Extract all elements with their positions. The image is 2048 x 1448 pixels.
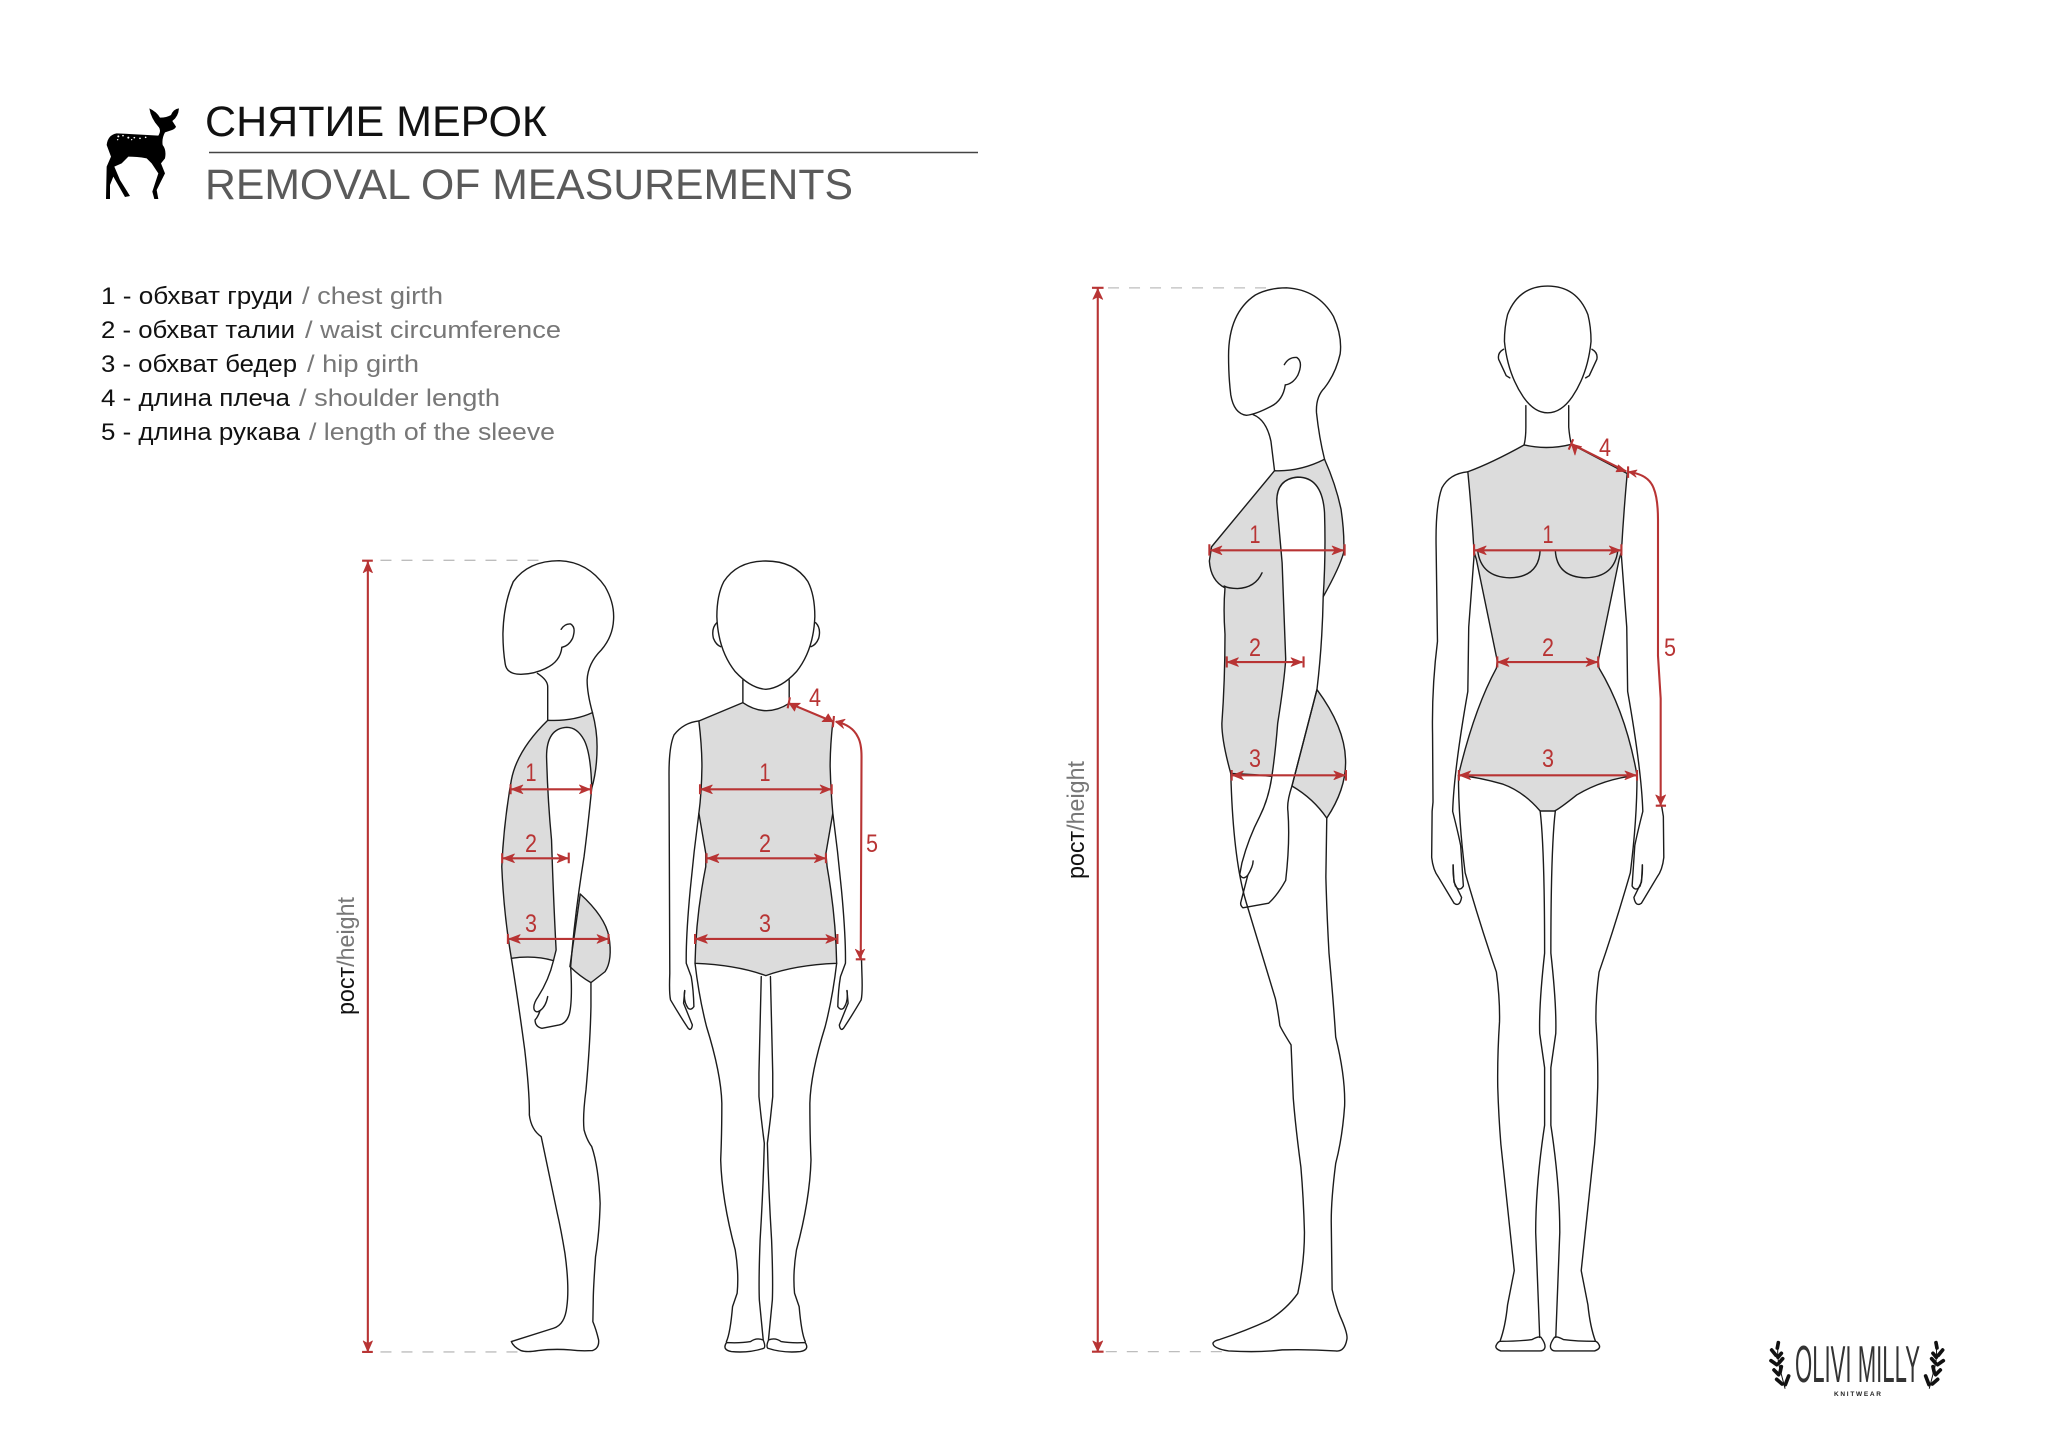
arrow: front chest	[700, 784, 832, 794]
logo: Olivi Milly Knitwear: KNITWEAR	[1834, 1391, 1881, 1398]
arrow: side chest	[1209, 544, 1345, 556]
label: child front numbers: 1	[760, 759, 770, 787]
label: child front numbers: 5	[866, 830, 878, 858]
legend: measurement list	[101, 283, 561, 446]
arrow: front waist	[707, 853, 826, 863]
figure: adult front view	[1432, 286, 1676, 1351]
label: adult front numbers: 2	[1542, 634, 1554, 662]
arrow: side waist	[502, 853, 569, 863]
icon: left laurel branch	[1771, 1343, 1789, 1388]
label: child side numbers	[525, 759, 537, 938]
legend: measurement list: 2 - обхват талии	[101, 317, 295, 344]
legend: measurement list: / chest girth	[302, 283, 443, 310]
left arm and leg	[1432, 472, 1545, 1351]
label: child side numbers: 3	[525, 910, 537, 938]
left arm and leg	[669, 721, 765, 1352]
legend: measurement list: 3 - обхват бедер	[101, 351, 297, 378]
label: child side numbers: 2	[525, 830, 537, 858]
figure: child side view	[333, 560, 614, 1352]
arrow: sleeve length	[835, 719, 865, 959]
legend: measurement list: / hip girth	[307, 351, 419, 378]
legend: measurement list: / length of the sleeve	[309, 419, 555, 446]
title: English heading: REMOVAL OF MEASUREMENTS	[205, 161, 853, 209]
label: adult side numbers: 3	[1249, 745, 1261, 773]
legend: measurement list: / waist circumference	[305, 317, 561, 344]
arrow: side chest	[511, 784, 591, 794]
icon: right laurel branch	[1926, 1343, 1943, 1388]
label: adult front numbers	[1542, 434, 1676, 773]
arrow: height	[362, 560, 540, 1352]
arrow: front waist	[1497, 656, 1598, 667]
label: child side numbers: 1	[526, 759, 536, 787]
right arm and leg	[767, 813, 862, 1352]
label: adult front numbers: 4	[1599, 434, 1611, 462]
arrow: shoulder length	[1569, 439, 1628, 478]
legend: measurement list: 5 - длина рукава	[101, 419, 301, 446]
label: child front numbers: 4	[809, 684, 821, 712]
label: adult height: рост/height	[1063, 761, 1090, 879]
label: adult front numbers: 1	[1542, 521, 1554, 549]
arrow: sleeve length	[1629, 470, 1666, 806]
label: child height: рост/height	[333, 897, 360, 1015]
arrow: front hip	[1459, 770, 1637, 781]
title: Russian heading: СНЯТИЕ МЕРОК	[205, 98, 547, 146]
arrow: side hip	[1232, 770, 1346, 781]
legend: measurement list: / shoulder length	[299, 385, 500, 412]
label: adult side numbers	[1249, 521, 1261, 773]
legend: measurement list: 1 - обхват груди	[101, 283, 293, 310]
arrow: height	[1092, 288, 1269, 1352]
label: adult side numbers: 2	[1249, 634, 1261, 662]
label: adult front numbers: 3	[1542, 745, 1554, 773]
icon: deer silhouette	[106, 108, 179, 199]
label: adult front numbers: 5	[1664, 634, 1676, 662]
arrow: shoulder length	[788, 697, 834, 727]
right arm and leg	[1550, 556, 1664, 1351]
figure: child front view	[669, 561, 878, 1352]
arrow: front chest	[1474, 544, 1621, 556]
logo: Olivi Milly Knitwear	[1771, 1336, 1943, 1398]
label: child front numbers: 2	[759, 830, 771, 858]
figure: adult side view	[1063, 288, 1347, 1352]
label: child front numbers	[759, 684, 878, 938]
arrow: side hip	[508, 934, 609, 944]
label: adult side numbers: 1	[1250, 521, 1260, 549]
arrow: side waist	[1227, 656, 1304, 667]
legend: measurement list: 4 - длина плеча	[101, 385, 291, 412]
arrow: front hip	[695, 934, 837, 944]
label: child front numbers: 3	[759, 910, 771, 938]
